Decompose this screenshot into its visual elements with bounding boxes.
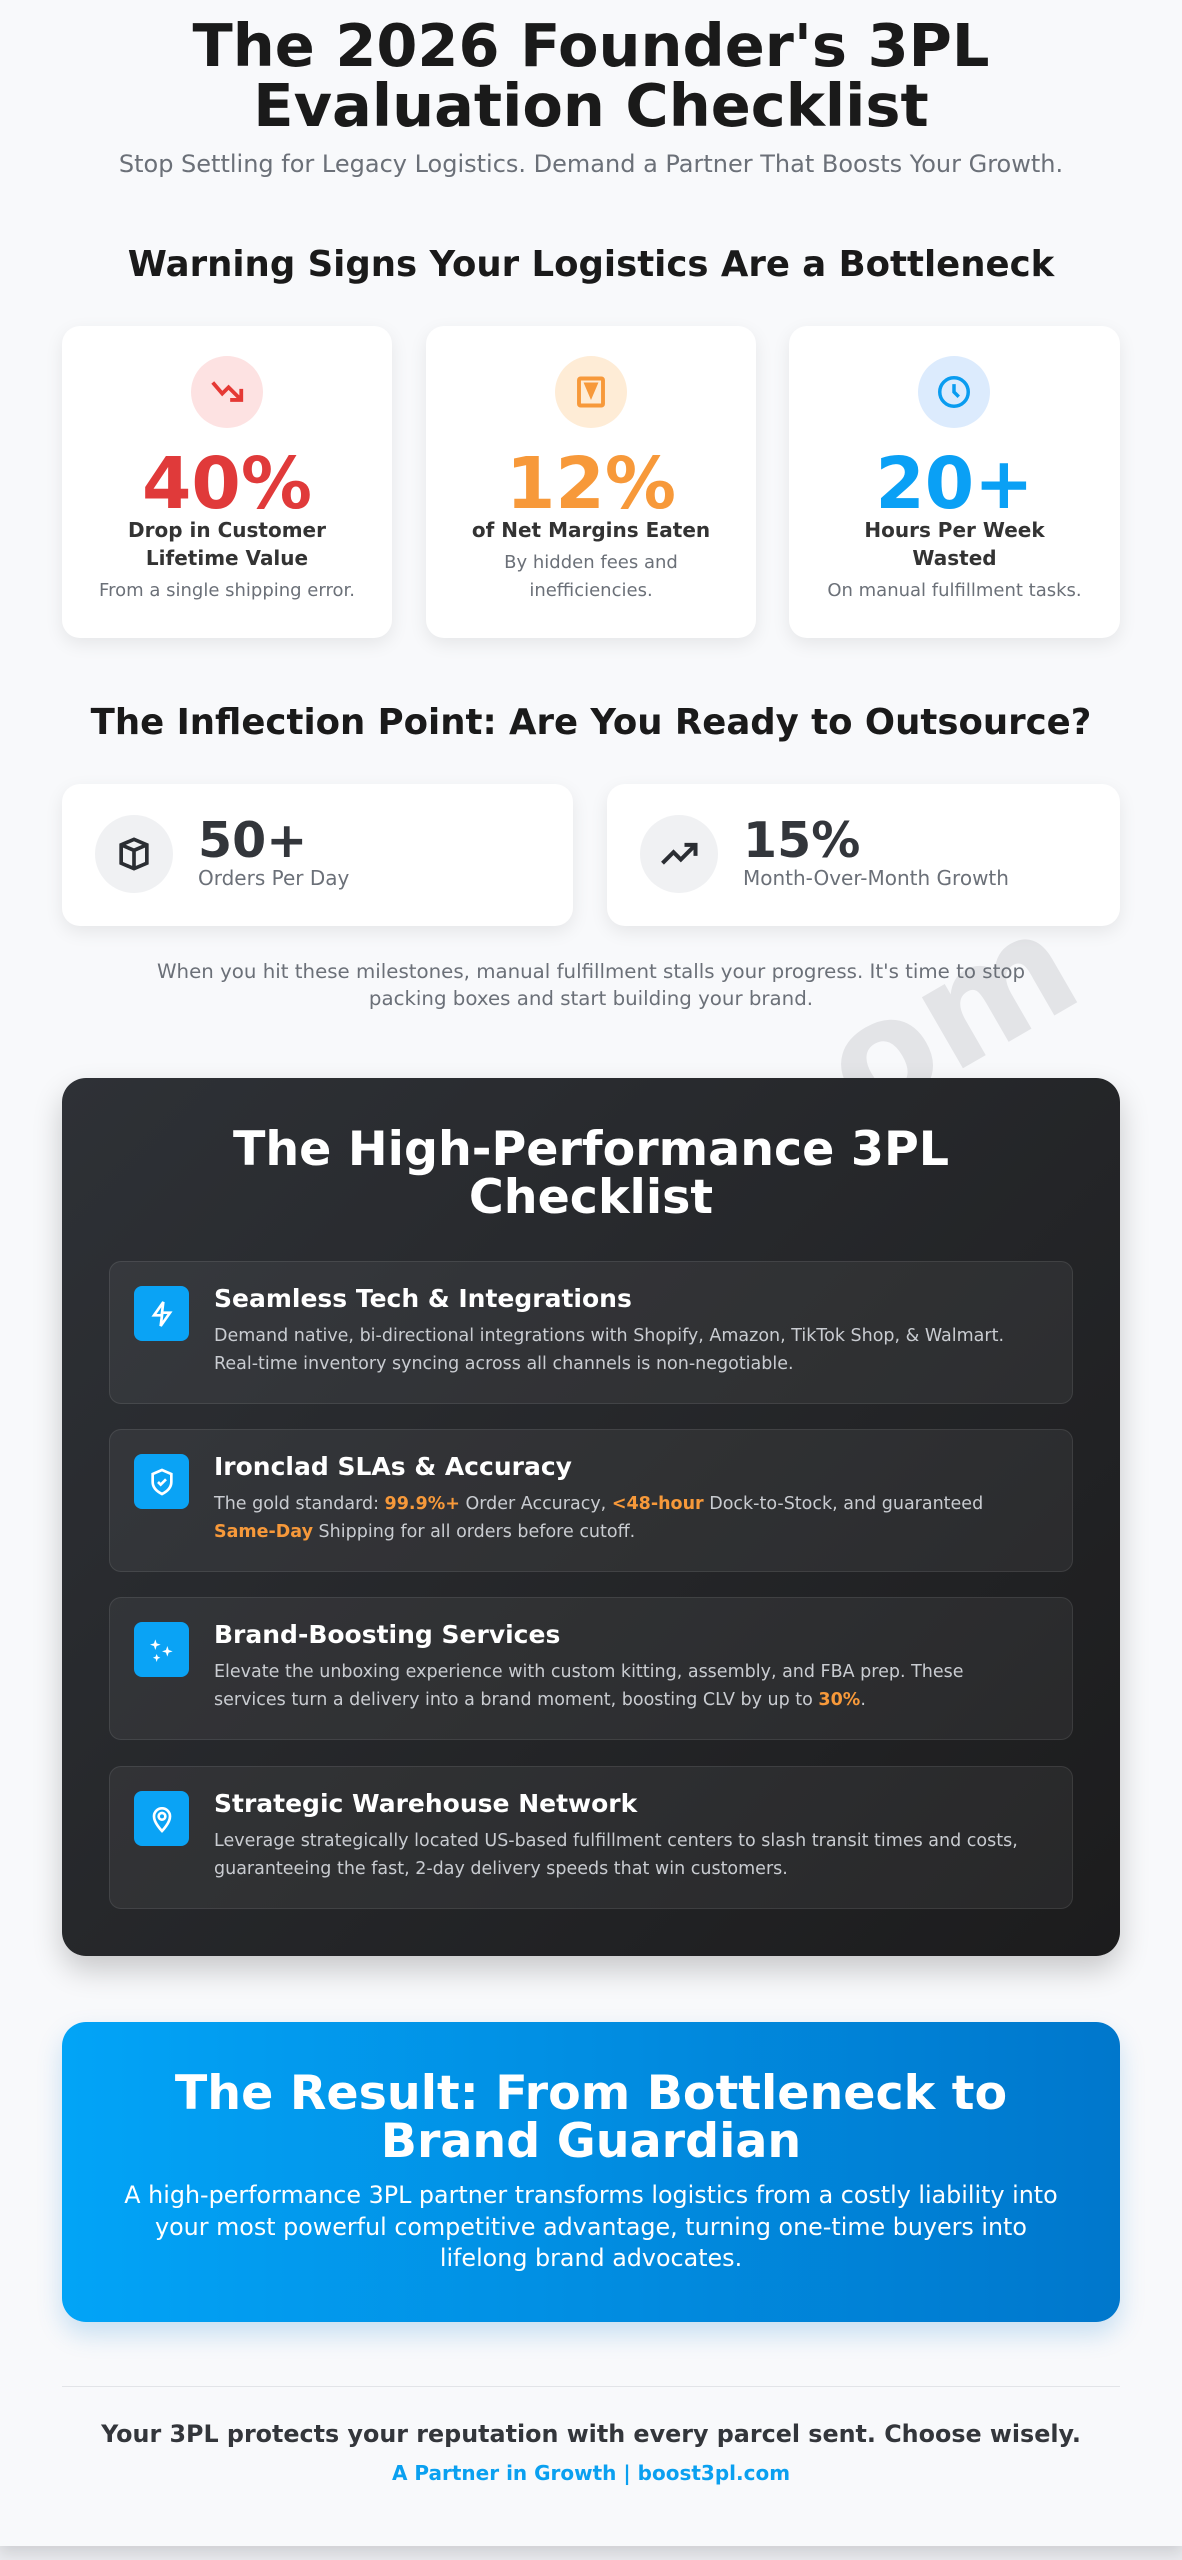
result paragraph: A high-performance 3PL partner transforms logistics from a costly liability into — [124, 2181, 1058, 2209]
card: 40%: Lifetime Value — [146, 546, 308, 570]
heading: warning signs: Warning Signs Your Logistics Are a Bottleneck — [128, 244, 1054, 285]
card: 12%: By hidden fees and — [504, 552, 678, 573]
card: 12%: 12% — [506, 442, 676, 525]
item: warehouse network: guaranteeing the fast, 2-day delivery speeds that win customers. — [214, 1859, 788, 1879]
card: 20+: Hours Per Week — [864, 518, 1045, 542]
item: SLAs — [109, 1429, 1073, 1572]
card: 20+: Wasted — [912, 546, 997, 570]
checklist title: Checklist — [469, 1170, 713, 1225]
card: 20+: On manual fulfillment tasks. — [827, 580, 1082, 601]
item: brand boosting — [109, 1597, 1073, 1740]
panel: result — [62, 2022, 1120, 2322]
item: brand boosting: Brand-Boosting Services — [214, 1620, 560, 1649]
card: 40%: Drop in Customer — [128, 518, 326, 542]
icon: bolt — [134, 1286, 189, 1341]
title — [192, 11, 989, 140]
icon: sparkles — [134, 1622, 189, 1677]
result title — [175, 2066, 1007, 2169]
card: 50+ orders: 50+ — [198, 812, 307, 869]
item: SLAs: The gold standard: 99.9%+ Order Accuracy, <48-hour Dock-to-Stock, and guaranteed — [214, 1494, 983, 1514]
heading: inflection point: The Inflection Point: Are You Ready to Outsource? — [91, 702, 1091, 743]
icon: receipt — [555, 356, 627, 428]
result title: The Result: From Bottleneck to — [175, 2066, 1007, 2121]
card: 12%: of Net Margins Eaten — [472, 518, 710, 542]
result paragraph: your most powerful competitive advantage, turning one-time buyers into — [155, 2212, 1027, 2240]
icon: box — [95, 815, 173, 893]
footer link: A Partner in Growth | boost3pl.com — [392, 2461, 790, 2485]
title: Evaluation Checklist — [253, 71, 929, 140]
icon: shield — [134, 1454, 189, 1509]
card: 20+: 20+ — [875, 442, 1034, 525]
card: 12%: inefficiencies. — [529, 580, 653, 601]
card: 20+ — [789, 326, 1120, 638]
icon: clock — [918, 356, 990, 428]
paragraph: milestones — [157, 960, 1025, 1010]
item: SLAs: Same-Day Shipping for all orders before cutoff. — [214, 1522, 635, 1542]
item: warehouse network: Strategic Warehouse Network — [214, 1789, 637, 1818]
card: 50+ orders — [62, 784, 573, 926]
icon: trend down — [191, 356, 263, 428]
item: warehouse network — [109, 1766, 1073, 1909]
item: tech: Seamless Tech & Integrations — [214, 1284, 632, 1313]
checklist title: The High-Performance 3PL — [233, 1122, 949, 1177]
card: 12% — [426, 326, 756, 638]
card: 40%: 40% — [142, 442, 312, 525]
card: 15% growth — [607, 784, 1120, 926]
paragraph: milestones: packing boxes and start building your brand. — [369, 987, 813, 1010]
watermark: om — [794, 877, 1105, 1157]
card: 15% growth: Month-Over-Month Growth — [743, 866, 1009, 890]
card: 40%: From a single shipping error. — [99, 580, 355, 601]
item: SLAs: Ironclad SLAs & Accuracy — [214, 1452, 572, 1481]
item: tech: Real-time inventory syncing across all channels is non-negotiable. — [214, 1354, 794, 1374]
result paragraph — [124, 2181, 1058, 2272]
item: brand boosting: Elevate the unboxing experience with custom kitting, assembly, and FBA prep. These — [214, 1662, 964, 1682]
icon: trend up — [640, 815, 718, 893]
footer tagline: Your 3PL protects your reputation with every parcel sent. Choose wisely. — [101, 2420, 1081, 2448]
result title: Brand Guardian — [381, 2114, 801, 2169]
card: 50+ orders: Orders Per Day — [198, 866, 349, 890]
item: tech — [109, 1261, 1073, 1404]
paragraph: milestones: When you hit these milestones, manual fulfillment stalls your progress. It's time to stop — [157, 960, 1025, 983]
item: tech: Demand native, bi-directional integrations with Shopify, Amazon, TikTok Shop, & Walmart. — [214, 1326, 1004, 1346]
card: 40% — [62, 326, 392, 638]
panel: checklist — [62, 1078, 1120, 1956]
checklist title — [233, 1122, 949, 1225]
title: The 2026 Founder's 3PL — [193, 11, 989, 80]
card: 15% growth: 15% — [743, 812, 860, 869]
item: brand boosting: services turn a delivery into a brand moment, boosting CLV by up to 30%. — [214, 1690, 866, 1710]
item: warehouse network: Leverage strategically located US-based fulfillment centers to slash transit times and costs, — [214, 1831, 1018, 1851]
subtitle: Stop Settling for Legacy Logistics. Demand a Partner That Boosts Your Growth. — [119, 150, 1063, 178]
result paragraph: lifelong brand advocates. — [440, 2244, 742, 2272]
icon: location pin — [134, 1791, 189, 1846]
